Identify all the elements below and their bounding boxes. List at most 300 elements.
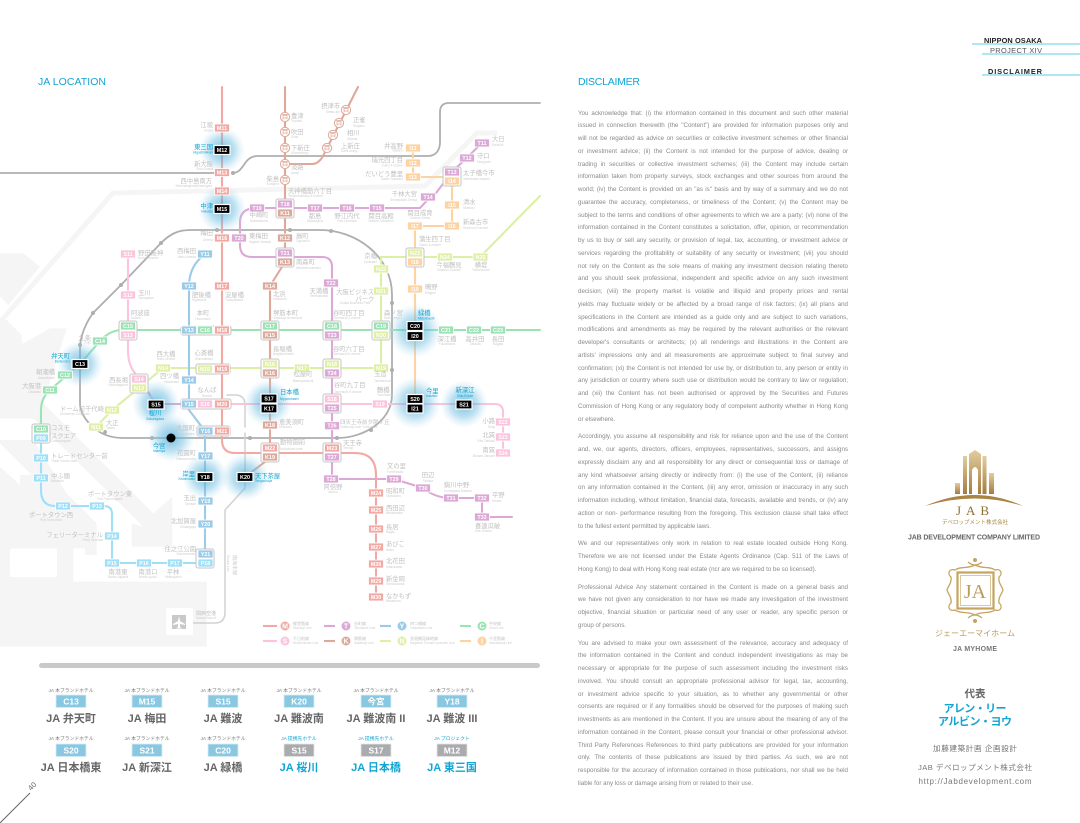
- station labels: centre: Nagata: [493, 342, 503, 346]
- station labels: north: 清水: [463, 197, 476, 206]
- station labels: south-east: Imazato: [426, 394, 438, 398]
- station labels: north: Shinmori-Furuichi: [463, 226, 488, 230]
- stations: Tanimachi line: T28: [326, 477, 336, 483]
- station labels: centre: Nishi-Umeda: [178, 255, 196, 259]
- hotel: JA Bentencho: [46, 687, 96, 725]
- disclaimer body text: Hong Kong) to deal with Hong Kong real estate (ncr are we required to be so licensed).: [578, 566, 816, 573]
- Hankyu ring stations: [280, 105, 351, 185]
- station labels: centre: 心斎橋: [195, 348, 214, 357]
- stations: Chuo line: C12: [60, 373, 70, 379]
- station labels: centre: 堺筋本町: [273, 308, 299, 317]
- station labels: centre: 横堤: [475, 260, 488, 269]
- stations: Tanimachi line: T11: [478, 141, 486, 147]
- stations: Tanimachi line: T15: [372, 206, 382, 212]
- interchange frames: [32, 167, 461, 568]
- disclaimer body text: only. The contents of these publications are issued by third parties. As such, we are not: [578, 754, 848, 761]
- partner hotel: JA Nihonbashi: JA 提携先ホテル: [358, 735, 394, 742]
- station labels: north: 中崎町: [250, 210, 269, 219]
- divider bar under the map: [39, 663, 540, 668]
- station labels: centre: 長田: [492, 335, 504, 343]
- station labels: centre: Yodoyabashi: [225, 298, 243, 302]
- map legend: Tanimachi Line: [354, 626, 375, 630]
- station labels: north: 関目成育: [407, 208, 433, 217]
- station labels: south-west: 西長堀: [109, 375, 128, 384]
- station labels: south-west: トレードセンター前: [51, 451, 108, 460]
- station labels: south-east: Nakamozu: [386, 599, 401, 603]
- stations: Imazatosuji line: I17: [411, 224, 419, 230]
- station labels: south-west: Daikokucho: [178, 432, 195, 436]
- disclaimer body text: Therefore we are not licensed under the Estate Agents Ordinance (Cap. 511 of the Laws of: [578, 553, 848, 560]
- station labels: south-east: 田辺: [422, 471, 435, 479]
- station labels: north: 守口: [477, 152, 490, 160]
- station labels: north: Senbayashi-Omiya: [390, 198, 417, 202]
- station labels: centre: 森ノ宮: [384, 308, 403, 317]
- station labels: south-west: Nanko-guchi: [139, 575, 157, 579]
- hotel: JA Namba South: [274, 687, 324, 725]
- stations: Sennichimae line: S19: [375, 402, 385, 408]
- stations: Nanko Port Town line: P18: [201, 561, 210, 567]
- station labels: south-east: Shin-Fukae: [457, 394, 473, 398]
- station labels: south-east: [255, 385, 505, 603]
- stations: Nanko Port Town line: P14: [107, 534, 117, 540]
- disclaimer body text: specifications in the Content are intended as a guide only and are subject to such variations,: [578, 314, 848, 321]
- disclaimer body text: [578, 110, 848, 787]
- stations: Imazatosuji line: I16: [448, 224, 456, 230]
- disclaimer body text: subject to the terms and conditions of other agreements to which we are a party; (vi) none of the: [578, 212, 848, 219]
- project: JA Higashi-Mikuni: [427, 736, 477, 774]
- map legend: 今里筋線: [489, 635, 505, 641]
- station labels: centre: 玉造: [374, 369, 387, 378]
- map legend: K: [343, 638, 349, 646]
- station labels: centre: 西大橋: [157, 349, 176, 358]
- station labels: south-east: Shoji: [488, 425, 495, 429]
- hotel: JA Namba: S15: [215, 696, 231, 706]
- stations: highlighted JA property stops: S17: [264, 396, 274, 402]
- station labels: north: 野江内代: [334, 211, 360, 220]
- station labels: centre: Takaida: [470, 342, 481, 346]
- disclaimer body text: Professional Advice Any statement contained in the Content is made on a general basis and: [578, 584, 848, 591]
- station labels: north: 太子橋今市: [463, 168, 494, 177]
- station labels: north: 新森古市: [463, 217, 488, 226]
- stations: Midosuji line: M26: [371, 527, 381, 533]
- disclaimer body text: decision; (viii) the property market is volatile and illiquid and property prices and rental: [578, 288, 848, 295]
- stations: Imazatosuji line: I14: [448, 179, 456, 185]
- station labels: south-west: Trade Center-mae: [51, 459, 77, 463]
- station labels: north: Shimizu: [463, 206, 475, 210]
- stations: Midosuji line: M27: [371, 545, 381, 551]
- stations: Midosuji line: M23: [327, 446, 337, 452]
- stations: Midosuji line: M21: [217, 429, 227, 435]
- station labels: south-east: 北巽: [482, 431, 495, 439]
- station labels: centre: 野田阪神: [138, 248, 163, 257]
- station labels: centre: Bentencho: [55, 360, 70, 364]
- station labels: north: Shimoshinjo: [291, 151, 309, 155]
- station labels: north: 都島: [309, 211, 321, 220]
- station labels: south-west: Imamiya: [153, 449, 165, 453]
- station labels: north: 相川: [347, 128, 360, 137]
- station labels: south-west: Taisho: [106, 426, 115, 430]
- station labels: centre: Osaka Business Park: [340, 301, 371, 305]
- station labels: north: 淡路: [291, 162, 304, 171]
- station labels: south-east: なかもず: [386, 591, 411, 600]
- disclaimer body text: or investment advice specific to your situation, as to whether any governmental or other: [578, 691, 848, 698]
- project header tag: NIPPON OSAKA: [984, 36, 1043, 45]
- station labels: south-west: ドーム前千代崎: [60, 404, 105, 413]
- disclaimer body text: the information contained in the Content and conduct independent investigations as may be: [578, 652, 848, 659]
- map legend: 中央線: [489, 620, 501, 626]
- station labels: centre: 北浜: [273, 289, 286, 298]
- map legend: [263, 620, 512, 646]
- stations: Midosuji line: M24: [371, 491, 381, 497]
- station labels: north: Sekime-Takadono: [368, 219, 394, 223]
- logo: JAB Development: JAB DEVELOPMENT COMPANY LIMITED: [908, 534, 1040, 542]
- logo: JA MyHome: JA MYHOME: [953, 646, 997, 653]
- disclaimer body text: We and our representatives only work in relation to real estate located outside Hong Kong.: [578, 540, 848, 547]
- stations: Nanko Port Town line: P17: [170, 561, 180, 567]
- map legend: Nagahori Tsurumi-ryokuchi Line: [410, 641, 455, 645]
- station labels: south-east: あびこ: [386, 540, 405, 548]
- disclaimer body text: liable for any loss or damage arising from or related to their use.: [578, 780, 753, 787]
- stations: Yotsubashi line: Y17: [201, 454, 210, 460]
- hotel: JA Namba South II: [347, 687, 405, 725]
- station labels: centre: 鴫野: [425, 282, 438, 291]
- project header tag: DISCLAIMER: [988, 67, 1043, 76]
- logo: JAB Development: デベロップメント株式会社: [942, 518, 1009, 526]
- disclaimer body text: will not be regarded as advice on securities or collective investment schemes or other financial: [578, 135, 848, 142]
- station labels: south-west: 桜川: [149, 408, 161, 417]
- stations: Midosuji line: M14: [217, 189, 227, 195]
- disclaimer body text: by us to buy or sell any security, or provision of legal, tax, accounting, or investment advice or: [578, 237, 848, 244]
- station labels: north: 吹田: [291, 127, 304, 136]
- map legend: Chuo Line: [489, 626, 504, 630]
- station labels: north: NishinakajimaMinamigata: [176, 184, 212, 188]
- stations: Nagahori Tsurumi-ryokuchi line: N13: [134, 386, 144, 392]
- station labels: north: 上新庄: [341, 141, 360, 150]
- station labels: south-east: Kitahanada: [386, 565, 402, 569]
- stations: Imazatosuji line: [406, 144, 460, 293]
- station labels: north: Nakazakicho: [250, 219, 268, 223]
- station labels: centre: Higobashi: [192, 298, 206, 302]
- station labels: centre: 淀屋橋: [225, 290, 245, 299]
- stations: Midosuji line: M29: [371, 579, 381, 585]
- disclaimer body text: expressly disclaim any and all responsibility for any direct or consequential loss or damage of: [578, 459, 848, 466]
- hotel: JA Namba: JA 本ブランドホテル: [200, 687, 246, 694]
- disclaimer body text: and you should seek professional, independent and specific advice on any such investment: [578, 275, 848, 282]
- station labels: south-west: 南港東: [109, 567, 128, 576]
- hotel: JA Namba: JA 難波: [204, 711, 242, 725]
- disclaimer body text: or investment advice; (ii) the Content is not intended for the purpose of advice, dealing or: [578, 148, 848, 155]
- station labels: south-east: 新深江: [456, 385, 475, 394]
- partner hotel: JA Nihonbashi: [351, 735, 401, 774]
- stations: Tanimachi line: T18: [280, 202, 290, 208]
- disclaimer body text: action or non- performance resulting from the foregoing. This exclusion clause shall take effect: [578, 510, 848, 517]
- station labels: north: Suita: [291, 135, 298, 139]
- project: JA Higashi-Mikuni: JA 東三国: [427, 760, 477, 774]
- stations: Sennichimae line: S13: [123, 333, 133, 339]
- station labels: south-east: Abiko: [386, 548, 394, 552]
- disclaimer body text: consents are required or if any formalities should be observed for the purposes of making such: [578, 703, 848, 710]
- station labels: north: 梅田: [200, 228, 213, 237]
- stations: Chuo line: C10: [36, 427, 46, 433]
- stations: Tanimachi line: [232, 139, 490, 521]
- station labels: south-west: 平林: [167, 567, 180, 576]
- stations: Sennichimae line: S16: [200, 402, 210, 408]
- disclaimer body text: objective, financial situation or particular need of any user or reader, any specific person or: [578, 609, 848, 616]
- station labels: south-east: 新金岡: [386, 574, 405, 583]
- station labels: south-west: 四ツ橋: [160, 371, 180, 380]
- logo: JA MyHome: [935, 558, 1015, 653]
- stations: Nagahori Tsurumi-ryokuchi line: N14: [158, 366, 168, 372]
- station labels: north: Shojaku: [353, 124, 365, 128]
- station labels: south-west: フェリーターミナル: [46, 530, 103, 539]
- station labels: centre: 谷町九丁目: [334, 380, 365, 389]
- station labels: south-west: コスモ: [51, 424, 70, 432]
- station labels: north: Kami-shinjo: [341, 149, 358, 153]
- station labels: south-west: なんば: [198, 385, 217, 394]
- station labels: north: Miyakojima: [307, 219, 323, 223]
- project header tag: [972, 36, 1080, 76]
- stations: Chuo line: C14: [95, 339, 105, 345]
- logo: JA MyHome: ジェーエーマイホーム: [935, 629, 1015, 638]
- station labels: north: 西中島南方: [181, 176, 212, 185]
- hotel: JA Midoribashi: C20: [215, 746, 231, 756]
- stations: Yotsubashi line: Y21: [201, 552, 210, 558]
- stations: Midosuji line: [214, 124, 384, 601]
- stations: Tanimachi line: T30: [418, 486, 428, 492]
- stations: Imazatosuji line: I12: [409, 161, 417, 167]
- stations: Nagahori Tsurumi-ryokuchi line: N22: [376, 267, 386, 273]
- station labels: south-east: Hirano: [492, 499, 502, 503]
- station labels: centre: 日本橋: [280, 387, 300, 396]
- stations: Tanimachi line: T26: [327, 424, 337, 430]
- partner hotel: JA Nihonbashi: S17: [368, 746, 384, 756]
- station labels: south-east: Nishitanabe: [386, 511, 403, 515]
- stations: Midosuji line: M25: [371, 508, 381, 514]
- station labels: south-west: Port Town-higashi: [97, 497, 123, 501]
- station labels: centre: 本町: [197, 308, 210, 317]
- station labels: south-east: 北花田: [386, 556, 405, 565]
- disclaimer body text: or elsewhere.: [578, 416, 615, 423]
- station labels: north: 東三国: [194, 142, 213, 151]
- station labels: north: Higashimikuni: [193, 150, 213, 154]
- station labels: centre: 恵美須町: [279, 417, 305, 426]
- station labels: north: 摂津市: [321, 101, 340, 110]
- station labels: centre: Tennoji: [343, 446, 353, 450]
- station labels: centre: 大阪ビジネス: [336, 287, 374, 296]
- station labels: south-west: ポートタウン西: [29, 510, 73, 519]
- stations: Tanimachi line: T29: [389, 477, 399, 483]
- hotel: JA Bentencho: JA 弁天町: [46, 711, 96, 725]
- map legend: Yotsubashi Line: [410, 626, 433, 630]
- stations: highlighted JA property stops: M15: [217, 207, 227, 213]
- station labels: centre: Nishi-Ohashi: [157, 357, 175, 361]
- station labels: south-west: 今宮: [153, 441, 165, 450]
- stations: Midosuji line: M30: [371, 595, 381, 601]
- disclaimer body text: and, we, our agents, directors, officers, employees, representatives, successors, and assigns: [578, 446, 848, 453]
- map legend: S: [283, 638, 288, 646]
- disclaimer body text: information including, without limitation, financial data, forecasts, available and trends, or (iv) any: [578, 497, 848, 504]
- stations: Imazatosuji line: I15: [448, 203, 456, 209]
- station labels: south-west: Cosmosquare: [51, 439, 71, 443]
- hotel: JA Nihonbashi East: JA 日本橋東: [41, 760, 101, 774]
- table: JA hotels and projects by station: [41, 687, 477, 774]
- station labels: south-east: 南巽: [482, 445, 495, 454]
- disclaimer body text: guarantee the accuracy, completeness, or timeliness of the Content; (v) the Content may be: [578, 199, 848, 206]
- hotel: JA Namba South II: 今宮: [367, 696, 385, 706]
- stations: Sennichimae line: S18: [327, 397, 337, 403]
- stations: Chuo line: C15: [123, 324, 133, 330]
- heading: JA Location: JA LOCATION: [38, 76, 106, 88]
- project header tag: PROJECT XIV: [990, 46, 1042, 55]
- project: JA Higashi-Mikuni: JA プロジェクト: [434, 736, 470, 742]
- station labels: south-east: 長居: [386, 523, 399, 531]
- stations: Midosuji line: M11: [217, 126, 227, 132]
- representatives block: 代表: [964, 687, 986, 700]
- station labels: centre: Tamatsukuri: [374, 379, 391, 383]
- station labels: north: 蒲生四丁目: [419, 234, 450, 243]
- station labels: centre: 谷町六丁目: [333, 344, 364, 353]
- stations: Tanimachi line: T31: [446, 496, 456, 502]
- map legend: Imazatosuji Line: [489, 641, 512, 645]
- stations: Tanimachi line: T24: [327, 371, 337, 377]
- stations: Chuo line: C16: [200, 328, 210, 334]
- station labels: south-west: Nanko-higashi: [108, 575, 128, 579]
- station labels: north: Daido-Toyosato: [381, 177, 403, 181]
- hotel: JA Shin-Fukae: [122, 735, 172, 774]
- stations: Imazatosuji line: I13: [409, 175, 417, 181]
- station labels: north: Ogimachi: [296, 239, 310, 243]
- map legend: 谷町線: [354, 620, 366, 626]
- stations: Nagahori Tsurumi-ryokuchi line: N12: [107, 408, 117, 414]
- station labels: north: 井高野: [384, 141, 404, 150]
- station labels: north: 中津: [200, 201, 214, 210]
- stations: Sennichimae line: S14: [134, 377, 144, 383]
- map legend: Sakaisuji Line: [354, 641, 374, 645]
- stations: Nagahori Tsurumi-ryokuchi line: N18: [327, 362, 337, 368]
- station labels: south-west: Ferry Terminal: [83, 538, 103, 542]
- stations: Tanimachi line: T20: [234, 236, 244, 242]
- stations: Sakaisuji line: K12: [280, 236, 290, 242]
- project: JA Higashi-Mikuni: M12: [444, 746, 461, 756]
- stations: Nanko Port Town line: P10: [36, 456, 46, 462]
- station labels: centre: 天満橋: [310, 286, 329, 295]
- stations: highlighted JA property stops: K17: [264, 406, 274, 412]
- station labels: centre: Kujo: [85, 340, 91, 344]
- station labels: centre: 西梅田: [177, 246, 196, 255]
- hotel: JA Shin-Fukae: JA 新深江: [122, 760, 172, 774]
- partner hotel: JA Sakuragawa: JA 提携先ホテル: [281, 735, 317, 742]
- icon: airport: [166, 608, 193, 635]
- stations: Nanko Port Town line: [34, 434, 213, 567]
- hotel: JA Namba South: JA 本ブランドホテル: [276, 687, 322, 694]
- station labels: north: Gamo 4-chome: [419, 243, 441, 247]
- station labels: centre: 阿波座: [131, 308, 150, 317]
- rail: coloured subway lines: [41, 87, 540, 597]
- station labels: north: Nakatsu: [201, 210, 213, 214]
- station labels: south-east: Kita-Tatsumi: [477, 439, 495, 443]
- disclaimer body text: yields may fluctuate widely or be affected by a broad range of risk factors; (ix) all plans and: [578, 301, 848, 308]
- disclaimer body text: any jurisdiction or country where such use or distribution would be contrary to law or regulation;: [578, 377, 848, 384]
- station labels: centre: Tanimachi 9-chome: [334, 390, 362, 394]
- station labels: south-east: 文の里: [387, 461, 406, 470]
- hotel: JA Namba South: K20: [291, 696, 307, 706]
- station labels: south-west: Hirabayashi: [165, 575, 182, 579]
- stations: Chuo line: C17: [265, 324, 275, 330]
- station labels: centre: 九条: [78, 333, 92, 342]
- map legend: 御堂筋線: [293, 620, 309, 626]
- company contact block: http://Jabdevelopment.com: [918, 777, 1032, 786]
- station labels: south-east: 天下茶屋: [255, 471, 280, 480]
- stations: Midosuji line: M13: [217, 170, 227, 176]
- station labels: south-east: 昭和町: [386, 486, 406, 495]
- stations: Nanko Port Town line: P15: [107, 561, 117, 567]
- station labels: south-west: Sakuragawa: [146, 417, 164, 421]
- stations: Nagahori Tsurumi-ryokuchi line: N23: [410, 251, 420, 257]
- stations: Imazatosuji line: I11: [409, 146, 417, 152]
- disclaimer body text: Accordingly, you assume all responsibility and risk for reliance upon and the use of the Content: [578, 433, 848, 440]
- station labels: south-east: 西田辺: [386, 504, 406, 512]
- stations: Nagahori Tsurumi-ryokuchi line: N21: [376, 289, 386, 295]
- map legend: C: [479, 624, 485, 630]
- stations: highlighted JA property stops: S21: [459, 402, 469, 408]
- station labels: south-east: 阿倍野: [324, 482, 343, 491]
- stations: Sakaisuji line: [262, 209, 292, 461]
- stations: Imazatosuji line: I19: [411, 287, 419, 293]
- station labels: centre: Tamagawa: [138, 296, 154, 300]
- stations: Nanko Port Town line: P11: [36, 476, 46, 482]
- highlighted station glows: [57, 127, 488, 501]
- hotel: JA Namba III: JA 本ブランドホテル: [429, 687, 475, 694]
- map legend: T: [344, 624, 349, 630]
- station labels: centre: 松屋町: [294, 369, 313, 378]
- hotel: JA Umeda: [124, 687, 170, 725]
- disclaimer body text: involved. You should consult an appropriate professional advisor for legal, tax, accounting,: [578, 678, 848, 685]
- disclaimer body text: investments as are mentioned in the Content. If you are unsure about the meaning of any of the: [578, 716, 848, 723]
- station labels: south-west: Hanazonocho: [176, 457, 196, 461]
- station labels: south-west: 玉出: [183, 493, 196, 502]
- disclaimer body text: Third Party References References to third party publications are provided for your information: [578, 742, 848, 749]
- station labels: centre: Minamimorimachi: [296, 266, 321, 270]
- station labels: south-west: 大阪港: [22, 381, 42, 390]
- station labels: centre: 南森町: [296, 257, 316, 266]
- station labels: centre: 長堀橋: [273, 344, 293, 353]
- station labels: centre: Midoribashi: [418, 316, 435, 320]
- disclaimer body text: on any information contained in the Content, (iii) any error, omission or inaccuracy in any such: [578, 484, 848, 491]
- rail: JR and Nankai lines: [0, 103, 540, 625]
- station labels: centre: Kyobashi: [364, 260, 377, 264]
- station labels: centre: Shitennoji-mae Yuhigaoka: [340, 425, 377, 429]
- stations: highlighted JA property stops: C20: [410, 324, 420, 330]
- stations: Chuo line: C11: [45, 388, 55, 394]
- stations: Nagahori Tsurumi-ryokuchi line: N19: [376, 366, 386, 372]
- hotel: JA Bentencho: C13: [63, 696, 79, 706]
- station labels: south-west: 南港口: [139, 567, 157, 576]
- station labels: centre: Ebisucho: [279, 425, 292, 429]
- station labels: centre: [51, 246, 504, 451]
- station labels: centre: 四天王寺前夕陽ケ丘: [340, 418, 390, 426]
- station labels: north: 瑞光四丁目: [372, 155, 403, 164]
- stations: Yotsubashi line: Y16: [201, 429, 210, 435]
- station labels: north: Sekime-Seiiku: [410, 216, 430, 220]
- stations: Tanimachi line: T32: [477, 496, 487, 502]
- disclaimer body text: information contained in the Content, please consult your financial or other professional advisor.: [578, 729, 848, 736]
- partner hotel: JA Sakuragawa: S15: [291, 746, 307, 756]
- station labels: south-west: 中ふ頭: [51, 471, 71, 480]
- stations: Sakaisuji line: K14: [265, 284, 275, 290]
- station labels: south-west: 岸里: [182, 470, 195, 478]
- station labels: south-west: Yotsubashi: [164, 380, 179, 384]
- station labels: south-west: 朝潮橋: [36, 367, 56, 376]
